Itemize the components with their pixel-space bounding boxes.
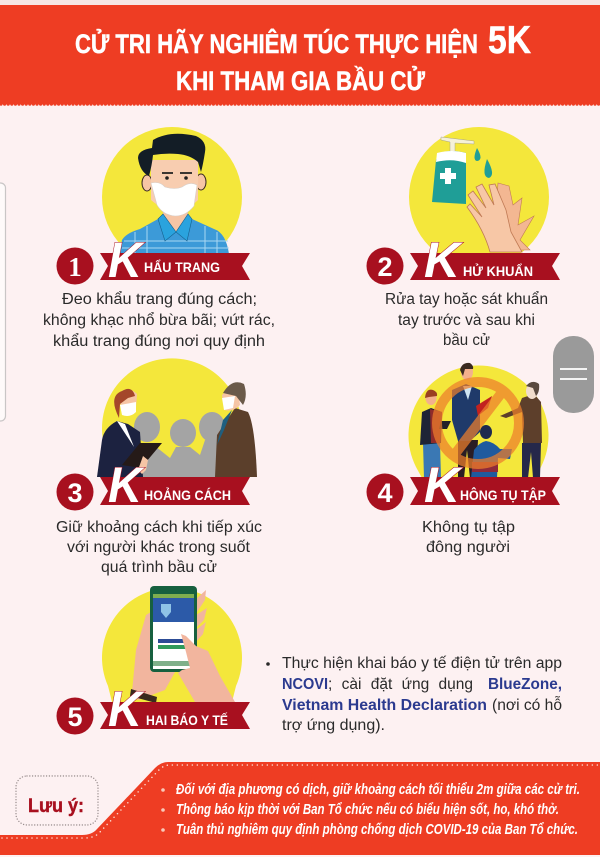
ribbon: khoảng cách (56, 457, 250, 513)
panel: khai báo y tế (56, 586, 562, 737)
note panel (0, 762, 600, 855)
text: khẩu trang: không khạc nhổ bừa bãi; vứt rác, (43, 312, 275, 329)
text: khẩu trang (43, 291, 275, 350)
text: khai báo y tế: ; cài đặt ứng dụng (328, 676, 473, 693)
ribbon: khử khuẩn (366, 232, 560, 288)
text: khai báo y tế: Vietnam Health Declaration (282, 697, 487, 714)
header banner (0, 0, 600, 104)
ribbon: khai báo y tế: K (108, 681, 146, 737)
ribbon: khoảng cách: K (108, 457, 146, 513)
text: khoảng cách: với người khác trong suốt (67, 539, 251, 556)
text: không tụ tập (422, 519, 515, 556)
note label: Lưu ý: (28, 796, 84, 817)
ribbon: khai báo y tế: 5 (67, 702, 83, 732)
ribbon: không tụ tập: HÔNG TỤ TẬP (460, 486, 546, 503)
panel: khử khuẩn (366, 127, 560, 349)
ribbon: khử khuẩn: HỬ KHUẨN (463, 262, 533, 279)
text: khoảng cách (56, 519, 262, 576)
icon: crowd with prohibition sign (408, 363, 548, 478)
title: 5K (488, 19, 531, 62)
left edge tab (0, 183, 6, 421)
ribbon: không tụ tập: K (424, 457, 464, 513)
note bullets (161, 782, 580, 838)
text: khử khuẩn (385, 291, 548, 349)
panel: khẩu trang (43, 127, 275, 350)
ribbon: khẩu trang: HẨU TRANG (144, 258, 220, 275)
text: khử khuẩn: bầu cử (443, 332, 490, 349)
icon: man wearing mask (102, 127, 242, 267)
ribbon: khử khuẩn: K (424, 232, 464, 288)
text: khử khuẩn: Rửa tay hoặc sát khuẩn (385, 291, 548, 308)
ribbon: không tụ tập: 4 (377, 478, 393, 508)
ribbon: khoảng cách: HOẢNG CÁCH (144, 487, 231, 503)
text: khẩu trang: Đeo khẩu trang đúng cách; (62, 291, 257, 308)
panel: không tụ tập (366, 363, 560, 556)
panel: khoảng cách (56, 358, 262, 576)
scroll handle (553, 336, 594, 413)
text: không tụ tập: đông người (426, 539, 510, 556)
ribbon: khai báo y tế: HAI BÁO Y TẾ (146, 712, 228, 728)
text: không tụ tập: Không tụ tập (422, 519, 515, 536)
text: khai báo y tế: (nơi có hỗ (492, 697, 562, 714)
icon: sanitizer and hands (409, 127, 549, 267)
icon: two people keeping distance (97, 358, 257, 478)
text: khai báo y tế: NCOVI (282, 676, 328, 693)
title (75, 19, 531, 96)
text: khoảng cách: quá trình bầu cử (101, 559, 217, 576)
note label (16, 776, 98, 825)
ribbon: khử khuẩn: 2 (377, 252, 393, 282)
text: khẩu trang: khẩu trang đúng nơi quy định (53, 333, 265, 350)
ribbon: khẩu trang: 1 (68, 252, 82, 282)
text: khoảng cách: Giữ khoảng cách khi tiếp xúc (56, 519, 262, 536)
text: khai báo y tế: BlueZone, (488, 676, 562, 693)
text: khử khuẩn: tay trước và sau khi (398, 312, 535, 329)
ribbon: khai báo y tế (56, 681, 250, 737)
ribbon: không tụ tập (366, 457, 560, 513)
title: CỬ TRI HÃY NGHIÊM TÚC THỰC HIỆN (75, 27, 478, 59)
text: khai báo y tế (266, 655, 562, 734)
ribbon: khẩu trang (56, 232, 250, 288)
ribbon: khoảng cách: 3 (67, 478, 83, 508)
ribbon: khẩu trang: K (108, 232, 146, 288)
text: khai báo y tế: trợ ứng dụng). (282, 717, 385, 734)
title: KHI THAM GIA BẦU CỬ (176, 64, 425, 96)
text: khai báo y tế: Thực hiện khai báo y tế điện tử trên app (282, 655, 562, 672)
icon: hand holding phone (102, 586, 242, 703)
